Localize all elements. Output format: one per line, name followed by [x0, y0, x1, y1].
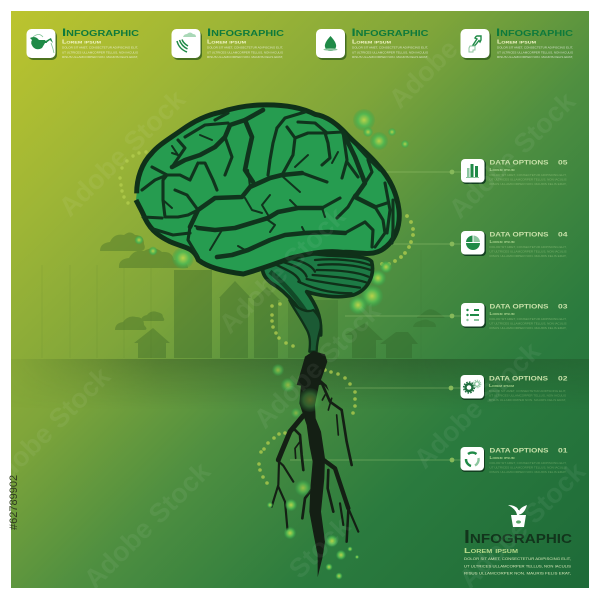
heading: Infographic — [496, 27, 573, 39]
text block: Lorem ipsum — [490, 455, 515, 460]
data option 04 — [461, 231, 568, 258]
watermark: Adobe Stock — [408, 336, 547, 474]
root crown — [297, 351, 329, 391]
text block: Lorem ipsum — [489, 383, 515, 388]
number: 03 — [558, 304, 568, 310]
text block: Lorem ipsum — [352, 40, 392, 46]
heading: Infographic — [352, 27, 429, 39]
tall building — [174, 270, 212, 358]
connector lines — [290, 172, 461, 460]
text block: RISUS ULLAMCORPER NON. MAURIS FELIS ERAT, — [490, 182, 567, 186]
text block: UT ULTRICES ULLAMCORPER TELLUS, NON IACULIS — [207, 50, 283, 54]
text block — [490, 455, 567, 474]
watermark: Adobe — [383, 34, 464, 114]
text block — [489, 383, 566, 402]
text block: UT ULTRICES ULLAMCORPER TELLUS, NON IACULIS — [490, 250, 567, 254]
cerebellum and stem — [263, 254, 372, 335]
data option 01 — [460, 447, 568, 474]
text block: DOLOR SIT AMET, CONSECTETUR ADIPISCING ELIT, — [489, 389, 566, 393]
number: 05 — [558, 160, 568, 166]
text block: DOLOR SIT AMET, CONSECTETUR ADIPISCING ELIT, — [490, 173, 567, 177]
text block — [490, 239, 567, 258]
heading: Infographic — [207, 27, 284, 39]
bottom text block: RISUS ULLAMCORPER NON. MAURIS FELIS ERAT, — [464, 572, 571, 576]
brain stem neck — [289, 300, 321, 352]
data option 02 — [460, 375, 568, 402]
root branches — [272, 384, 358, 543]
clouds — [100, 232, 145, 251]
text block: DOLOR SIT AMET, CONSECTETUR ADIPISCING ELIT, — [62, 46, 138, 50]
watermark: Adobe Stock — [443, 86, 582, 224]
data option 03 — [461, 303, 568, 330]
heading: DATA OPTIONS — [490, 448, 548, 454]
glowing circles over roots — [267, 364, 359, 580]
text block — [207, 40, 283, 59]
text block: RISUS ULLAMCORPER NON. MAURIS FELIS ERAT, — [489, 398, 566, 402]
top item 4 — [460, 27, 573, 60]
connector dots — [449, 170, 454, 462]
text block — [490, 311, 567, 330]
text block: DOLOR SIT AMET, CONSECTETUR ADIPISCING ELIT, — [352, 46, 428, 50]
brain — [136, 105, 399, 335]
text block: RISUS ULLAMCORPER NON. MAURIS FELIS ERAT, — [490, 470, 567, 474]
text block: UT ULTRICES ULLAMCORPER TELLUS, NON IACULIS — [489, 394, 566, 398]
text block — [497, 40, 573, 59]
data option 05 — [461, 159, 568, 186]
text block: UT ULTRICES ULLAMCORPER TELLUS, NON IACULIS — [490, 322, 567, 326]
heading: DATA OPTIONS — [490, 232, 548, 238]
text block — [62, 40, 138, 59]
ground band — [24, 359, 589, 397]
text block: RISUS ULLAMCORPER NON. MAURIS FELIS ERAT, — [490, 326, 567, 330]
houses — [134, 328, 170, 358]
watermark: Adobe Stock — [78, 456, 217, 594]
text block: DOLOR SIT AMET, CONSECTETUR ADIPISCING ELIT, — [490, 245, 567, 249]
heading: DATA OPTIONS — [489, 376, 548, 382]
watermark: Stock — [283, 510, 357, 584]
icon: pie chart — [461, 231, 486, 256]
text block — [352, 40, 428, 59]
bottom text block: DOLOR SIT AMET, CONSECTETUR ADIPISCING ELIT, — [464, 557, 571, 561]
number: 01 — [558, 448, 568, 454]
bottom text block: UT ULTRICES ULLAMCORPER TELLUS, NON IACULIS — [464, 564, 572, 568]
text block: RISUS ULLAMCORPER NON. MAURIS FELIS ERAT, — [207, 55, 283, 59]
text block: DOLOR SIT AMET, CONSECTETUR ADIPISCING ELIT, — [490, 317, 567, 321]
text block: DOLOR SIT AMET, CONSECTETUR ADIPISCING ELIT, — [490, 461, 567, 465]
city silhouette — [100, 232, 445, 358]
top item 3 — [316, 27, 429, 60]
text block: RISUS ULLAMCORPER NON. MAURIS FELIS ERAT, — [62, 55, 138, 59]
text block: Lorem ipsum — [497, 40, 537, 46]
sulci — [142, 110, 393, 257]
roots — [272, 351, 358, 577]
bottom text block: Lorem ipsum — [464, 546, 518, 555]
text block: RISUS ULLAMCORPER NON. MAURIS FELIS ERAT, — [352, 55, 428, 59]
number: 04 — [558, 232, 568, 238]
text block: UT ULTRICES ULLAMCORPER TELLUS, NON IACULIS — [490, 466, 567, 470]
text block: Lorem ipsum — [490, 311, 515, 316]
text block: Lorem ipsum — [207, 40, 247, 46]
icon: watering can — [26, 29, 57, 60]
text block: Lorem ipsum — [490, 167, 515, 172]
watermark: Adobe Stock — [248, 296, 387, 434]
cerebrum outline — [136, 105, 399, 274]
watermark: Adobe Stock — [53, 84, 192, 222]
text block: DOLOR SIT AMET, CONSECTETUR ADIPISCING ELIT, — [497, 46, 573, 50]
text block: Lorem ipsum — [62, 40, 102, 46]
trunk — [299, 380, 325, 577]
text block: UT ULTRICES ULLAMCORPER TELLUS, NON IACULIS — [497, 50, 573, 54]
top item 1 — [26, 27, 139, 60]
icon: list — [461, 303, 486, 328]
arrows — [219, 281, 251, 358]
text block: RISUS ULLAMCORPER NON. MAURIS FELIS ERAT, — [497, 55, 573, 59]
side credit: #62789902 — [8, 475, 20, 530]
icon: water drop — [316, 29, 346, 60]
bottom heading: Infographic — [464, 527, 573, 547]
dotted arcs — [118, 150, 415, 485]
heading: DATA OPTIONS — [490, 160, 548, 166]
text block — [490, 167, 567, 186]
icon: satellite dish — [172, 29, 202, 60]
text block: RISUS ULLAMCORPER NON. MAURIS FELIS ERAT, — [490, 254, 567, 258]
bottom text block — [464, 546, 572, 576]
text block: UT ULTRICES ULLAMCORPER TELLUS, NON IACULIS — [352, 50, 428, 54]
text block: Lorem ipsum — [490, 239, 515, 244]
heading: DATA OPTIONS — [490, 304, 548, 310]
watermark: Adobe Stock — [213, 201, 352, 339]
top item 2 — [172, 27, 284, 60]
icon: recycle — [460, 447, 485, 472]
text block: UT ULTRICES ULLAMCORPER TELLUS, NON IACULIS — [490, 178, 567, 182]
icon: potted plant — [508, 505, 527, 527]
icon: bar chart — [461, 159, 486, 184]
watermark: Adobe Stock — [453, 456, 592, 594]
heading: Infographic — [62, 27, 139, 39]
number: 02 — [558, 376, 568, 382]
glowing circles behind brain — [134, 109, 409, 314]
icon: gears — [460, 375, 485, 400]
icon: arrows — [460, 29, 491, 60]
text block: DOLOR SIT AMET, CONSECTETUR ADIPISCING ELIT, — [207, 46, 283, 50]
thin vertical chart lines — [42, 250, 421, 358]
text block: UT ULTRICES ULLAMCORPER TELLUS, NON IACULIS — [62, 50, 138, 54]
